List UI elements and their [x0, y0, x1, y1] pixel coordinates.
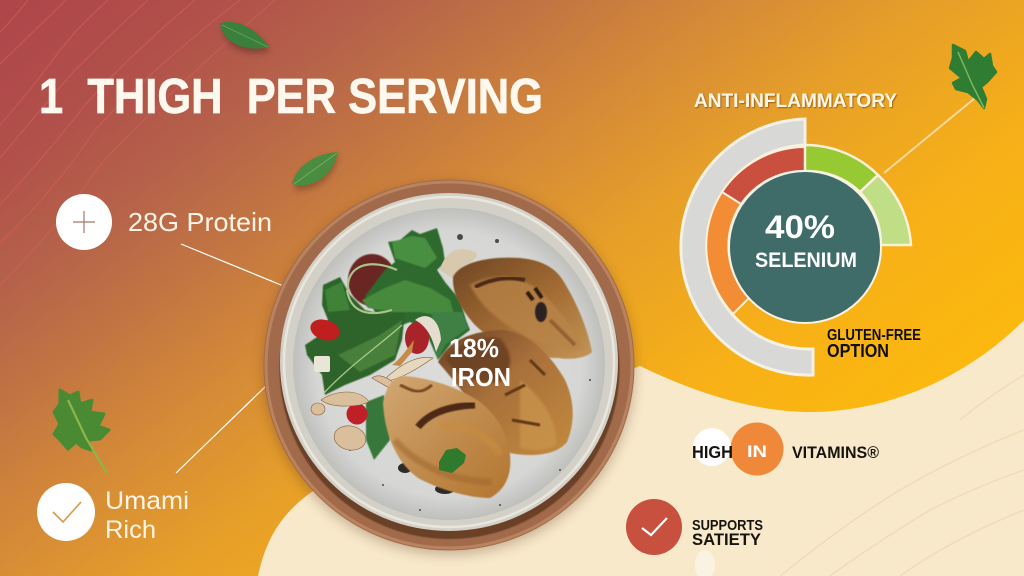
pale onion beside chicken: [440, 249, 477, 278]
icon: lower-left parsley leaf: [54, 390, 109, 473]
red onion and radicchio: [348, 254, 396, 306]
label: in: IN: [747, 442, 767, 461]
segment: light green: [860, 175, 911, 245]
plate speckles: [339, 234, 591, 511]
leader line: donut to parsley: [884, 98, 975, 173]
label: 40%: 40%: [765, 209, 835, 245]
badge: high in vitamins: [692, 422, 879, 476]
outer grey ring: [681, 119, 813, 375]
icon: top-right parsley leaf: [950, 45, 996, 108]
plate with chicken and salad: [263, 180, 635, 555]
icon: red check circle: [626, 499, 682, 555]
heading: anti-inflammatory: ANTI-INFLAMMATORY: [694, 91, 897, 112]
white circle behind high: [693, 428, 731, 466]
callout: 28G protein: [56, 194, 303, 294]
centre circle: [729, 171, 881, 323]
label: umami rich: Umami: [105, 487, 189, 515]
icon: middle basil leaf: [292, 152, 338, 190]
plate shadow: [263, 183, 635, 555]
orange circle: [730, 422, 784, 476]
label: gluten-free option: OPTION: [827, 341, 889, 361]
almonds and onion pieces: [311, 357, 433, 453]
label: vitamins: VITAMINS®: [792, 443, 879, 462]
faint cream dot: [695, 550, 715, 576]
cream lower-right wave panel: [258, 320, 1024, 576]
title: 1 THIGH PER SERVING: [39, 70, 543, 124]
cherry tomatoes: [308, 316, 342, 344]
radish slice: [415, 316, 441, 352]
segment: orange: [706, 192, 749, 314]
terracotta outer plate: [264, 180, 634, 550]
label: selenium: SELENIUM: [755, 249, 857, 272]
label: supports satiety: SATIETY: [692, 531, 761, 549]
leader line: protein to plate: [181, 244, 303, 294]
label: umami rich: Rich: [105, 516, 156, 544]
salad: [305, 228, 470, 460]
label: high: HIGH: [692, 442, 733, 462]
callout: umami rich: [37, 386, 266, 544]
garnish: [439, 448, 466, 473]
inner shadow gap: [280, 199, 620, 539]
chicken thigh: upper right: [453, 258, 592, 359]
label: supports satiety: SUPPORTS: [692, 517, 763, 534]
label: 18% iron: 18%: [449, 333, 499, 363]
icon: plus circle: [56, 194, 112, 250]
salad greens: [305, 228, 470, 460]
icon: top basil leaf: [220, 22, 270, 53]
badge: supports satiety: [626, 499, 763, 555]
grey ceramic plate: [280, 193, 618, 531]
segment: green: [805, 145, 878, 192]
decorative wave lines: [0, 0, 275, 285]
label: 28G protein: 28G Protein: [128, 207, 272, 237]
donut chart: [681, 119, 911, 375]
leader line: umami to plate: [176, 386, 266, 473]
chicken thigh: front: [383, 376, 510, 498]
label: 18% iron: IRON: [451, 362, 511, 392]
label: gluten-free option: GLUTEN-FREE: [827, 327, 921, 344]
segment: red: [722, 147, 805, 204]
chicken thigh: middle: [438, 330, 573, 455]
faint texture lines on cream panel: [780, 375, 1024, 576]
icon: check circle: [37, 483, 95, 541]
